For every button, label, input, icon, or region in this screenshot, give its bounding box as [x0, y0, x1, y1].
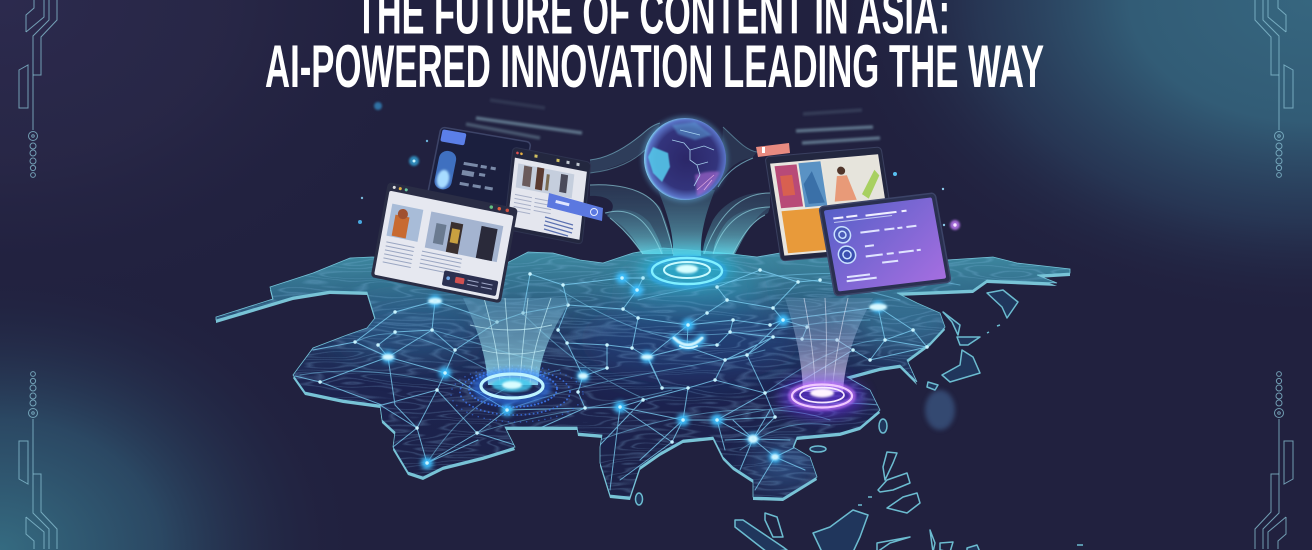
- glowing particles: [358, 102, 960, 230]
- hologram ring: right purple: [780, 377, 864, 417]
- map extruded edge: [216, 251, 1070, 501]
- network nodes: [320, 270, 927, 463]
- glow around left ring: speckles: [451, 366, 583, 422]
- art tile blue: [798, 161, 827, 207]
- funnel petals left: [590, 185, 673, 254]
- map of Asia: [200, 248, 1100, 550]
- photo: group: [425, 212, 503, 262]
- circuit decoration: top right: [1255, 0, 1293, 177]
- panel: art gallery tablet: [765, 147, 897, 261]
- right hologram beam: [785, 298, 873, 392]
- funnel wisps above: [590, 123, 757, 187]
- panel: dark dashboard: [427, 127, 531, 214]
- regional haze on map: [340, 265, 960, 487]
- circuit decoration: top left: [19, 0, 57, 177]
- funnel column: [658, 190, 715, 256]
- circuit decoration: bottom right: [1255, 372, 1293, 549]
- globe landmasses: [648, 122, 720, 196]
- page photos: [516, 163, 574, 198]
- network lines: [295, 260, 960, 490]
- art tile peach figure: [822, 156, 883, 205]
- dark footer card: [442, 270, 498, 296]
- network node glow: [388, 278, 878, 463]
- panel: purple tablet: [819, 193, 951, 296]
- panel: back white page: [504, 147, 591, 244]
- floating streaks: [466, 100, 880, 143]
- dim earth-limb glow near Japan: [925, 390, 955, 430]
- map land: [216, 248, 1070, 498]
- central funnel: [590, 123, 770, 256]
- photo: person: [386, 204, 423, 242]
- tablet content lines: [838, 226, 925, 281]
- hologram ring: left: [477, 373, 547, 401]
- pink tag: [756, 143, 790, 157]
- globe: [642, 116, 728, 202]
- body lines: [383, 242, 462, 277]
- hologram ring: centre: [639, 250, 735, 286]
- central crescent on map: [674, 338, 702, 348]
- window dots: [392, 185, 509, 212]
- tablet circular icons: [833, 226, 857, 264]
- bright city patches: [382, 298, 887, 460]
- left hologram beam: [463, 298, 572, 385]
- blue floating tag: [547, 193, 603, 221]
- art tile orange: [782, 207, 834, 253]
- dashboard bars: [459, 162, 497, 191]
- page lines: [513, 194, 552, 218]
- map fine network texture: [216, 252, 1070, 498]
- art tile red: [775, 164, 803, 208]
- blue badge: [440, 129, 467, 145]
- circuit decoration: bottom left: [19, 372, 57, 549]
- small text block under tag: [544, 217, 573, 236]
- funnel petals right: [703, 192, 770, 254]
- tablet header lines: [833, 210, 907, 220]
- title: [265, 0, 1044, 100]
- islands: [636, 290, 1083, 550]
- toolbar dots: [516, 151, 580, 166]
- capsule gauge: [433, 150, 458, 191]
- panel: front white page: [371, 182, 518, 303]
